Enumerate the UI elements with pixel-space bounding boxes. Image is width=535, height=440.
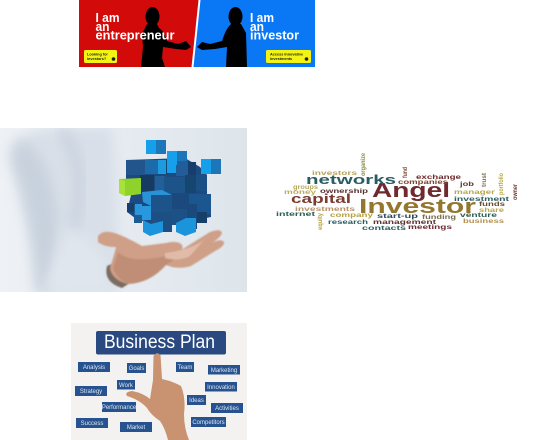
keyword: Strategy: Strategy — [80, 389, 102, 395]
word: contacts: contacts — [362, 225, 407, 232]
keyword: Work: Work — [119, 383, 134, 389]
word: start-up: start-up — [377, 213, 418, 220]
lower right cube — [176, 218, 196, 236]
keyword: Analysis: Analysis — [83, 365, 105, 371]
right cube — [201, 159, 221, 174]
word: funding: funding — [422, 214, 456, 221]
word: Investor: Investor — [359, 196, 476, 218]
word: investments: investments — [295, 206, 356, 213]
keyword boxes — [75, 362, 243, 432]
access innovative investments button: Access Innovative — [270, 52, 303, 56]
word: portfolio: portfolio — [498, 173, 505, 195]
lower left cube — [143, 220, 163, 236]
investor heading: an — [250, 19, 264, 34]
word: internet: internet — [276, 211, 316, 218]
plan background — [71, 323, 247, 440]
word: research: research — [328, 219, 368, 226]
word: companies: companies — [398, 179, 449, 186]
keyword: Market: Market — [127, 425, 145, 431]
keyword: Goals — [127, 363, 146, 373]
word: funds: funds — [479, 201, 506, 208]
keyword: Innovation: Innovation — [207, 385, 235, 391]
keyword: Performance: Performance — [102, 405, 137, 411]
business plan title: Business Plan — [104, 332, 215, 353]
word: Angel: Angel — [372, 180, 450, 202]
banner: entrepreneur and investor — [79, 0, 315, 67]
word: exchange: exchange — [416, 174, 462, 181]
photo: business plan — [71, 323, 247, 440]
pointing hand — [126, 353, 189, 440]
entrepreneur silhouette — [141, 7, 191, 67]
keyword: Ideas — [187, 395, 206, 405]
word: job: job — [459, 181, 474, 188]
word: venture: venture — [460, 212, 498, 219]
word cloud: angel investor — [276, 153, 519, 232]
looking for investors button: Looking for — [87, 52, 108, 56]
keyword: Ideas: Ideas — [189, 398, 204, 404]
keyword: Marketing: Marketing — [211, 368, 237, 374]
word: share: share — [479, 207, 505, 214]
keyword: Activities — [211, 403, 243, 413]
word: owner: owner — [512, 184, 519, 200]
keyword: Performance — [102, 402, 137, 412]
keyword: Strategy — [75, 386, 107, 396]
investor silhouette — [197, 7, 247, 67]
blue investor panel — [194, 0, 315, 67]
word: capital: capital — [291, 191, 351, 206]
entrepreneur heading: entrepreneur — [96, 28, 174, 42]
word: manager: manager — [454, 189, 496, 196]
word: investment: investment — [454, 196, 510, 203]
looking for investors button — [84, 50, 117, 63]
floating cubes — [119, 140, 221, 236]
keyword: Innovation — [205, 382, 237, 392]
word: management: management — [373, 219, 437, 226]
keyword: Goals: Goals — [129, 366, 144, 372]
hand — [98, 230, 224, 288]
keyword: Market — [120, 422, 152, 432]
keyword: Work — [117, 380, 135, 390]
word: networks: networks — [306, 172, 396, 187]
access innovative investments button — [266, 50, 311, 63]
looking for investors button: investors? — [87, 57, 107, 61]
access innovative investments button: investments — [270, 57, 292, 61]
word: organize: organize — [360, 153, 367, 176]
word: ownership: ownership — [320, 188, 368, 195]
investor heading: I am — [250, 10, 274, 25]
keyword: Team — [176, 362, 194, 372]
keyword: Success — [76, 418, 108, 428]
keyword: Marketing — [208, 365, 240, 374]
entrepreneur heading: I am — [96, 10, 120, 25]
keyword: Analysis — [78, 362, 110, 372]
word: investors: investors — [312, 170, 358, 177]
keyword: Team: Team — [178, 365, 192, 371]
keyword: Competitors — [191, 417, 226, 427]
upper middle cube — [167, 151, 187, 173]
keyword: Competitors: Competitors — [192, 420, 225, 426]
photo: hand holding floating blue cubes — [0, 128, 247, 292]
top cube — [146, 140, 166, 154]
green cube — [119, 178, 141, 196]
word: business: business — [463, 218, 505, 225]
word: money: money — [284, 189, 317, 196]
word: meetings: meetings — [408, 224, 453, 231]
entrepreneur heading: an — [96, 19, 110, 34]
keyword: Activities: Activities — [215, 406, 239, 412]
word: trust: trust — [481, 172, 488, 187]
red entrepreneur panel — [79, 0, 198, 67]
word: fund: fund — [402, 167, 409, 178]
word: equity: equity — [317, 213, 324, 230]
dark cube mass — [126, 158, 211, 224]
word: company: company — [330, 212, 374, 219]
word: groups: groups — [293, 184, 318, 191]
blurred shirt and arm — [8, 128, 118, 292]
photo background — [0, 128, 247, 292]
investor heading: investor — [250, 28, 299, 42]
keyword: Success: Success — [81, 421, 103, 427]
